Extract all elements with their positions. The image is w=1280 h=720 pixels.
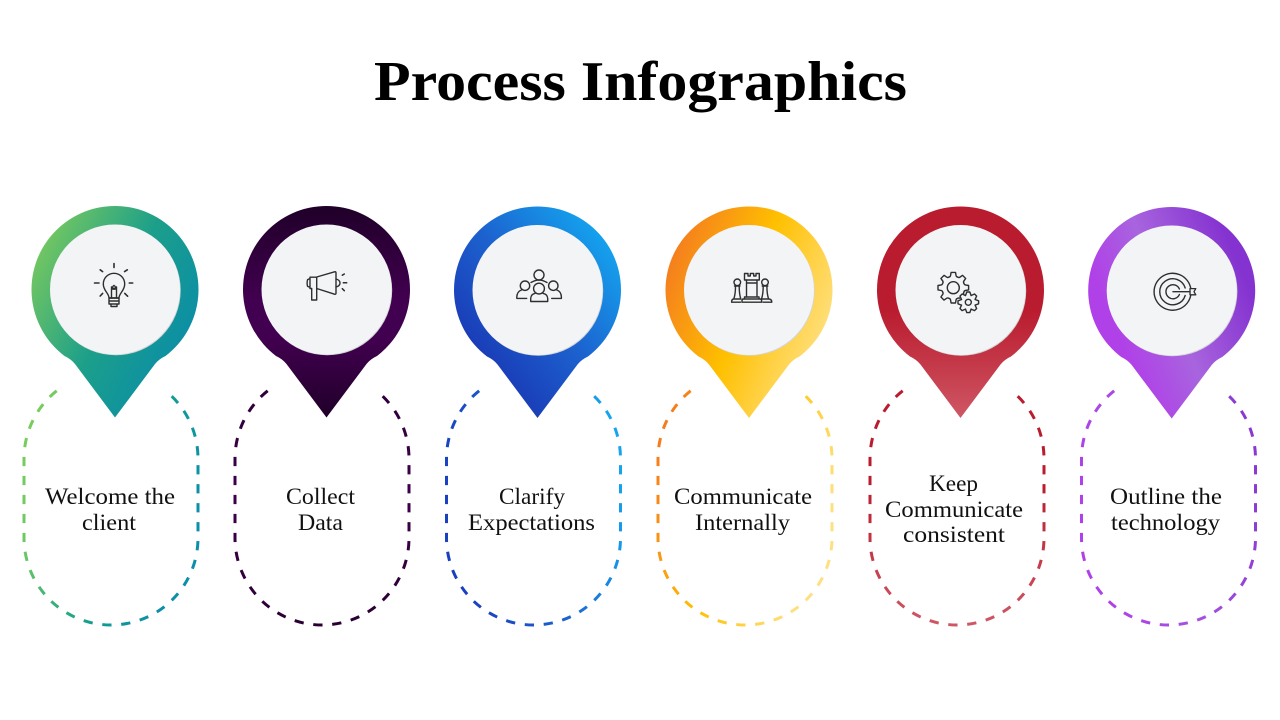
dashed outline 1: [24, 390, 198, 625]
icon: target with arrow: [1154, 273, 1196, 310]
location pin 4: [666, 207, 832, 418]
label 3: Expectations: [468, 510, 595, 535]
label 2: [286, 484, 356, 535]
label 5: Communicate: [885, 497, 1023, 522]
label 6: technology: [1111, 510, 1221, 535]
icon: gears: [938, 272, 979, 313]
step 1: welcome the client: [24, 206, 199, 625]
dashed outline 3: [446, 390, 620, 625]
icon: chess pieces: [732, 274, 772, 302]
location pin 1: [32, 206, 199, 418]
icon: light bulb: [94, 264, 133, 306]
label 1: [45, 484, 175, 535]
label 1: Welcome the: [45, 484, 175, 509]
dashed outline 5: [870, 390, 1044, 625]
location pin 5: [877, 207, 1044, 418]
label 1: client: [82, 510, 137, 535]
label 4: [674, 484, 812, 535]
label 4: Communicate: [674, 484, 812, 509]
step 3: clarify expectations: [446, 207, 621, 625]
label 5: consistent: [903, 522, 1006, 547]
dashed outline 2: [235, 390, 409, 625]
icon: group of people: [517, 270, 561, 302]
step 5: keep communicate consistent: [870, 207, 1044, 625]
step 6: outline the technology: [1082, 207, 1256, 625]
label 3: Clarify: [499, 484, 565, 509]
label 6: [1110, 484, 1222, 535]
label 4: Internally: [695, 510, 791, 535]
location pin 2: [243, 206, 410, 418]
step 2: collect data: [235, 206, 410, 625]
label 5: Keep: [929, 471, 978, 496]
label 5: [885, 471, 1023, 547]
label 6: Outline the: [1110, 484, 1222, 509]
title: Process Infographics: [374, 51, 907, 113]
label 2: Data: [298, 510, 343, 535]
location pin 6: [1088, 207, 1255, 418]
label 2: Collect: [286, 484, 356, 509]
dashed outline 4: [658, 390, 832, 625]
dashed outline 6: [1082, 390, 1256, 625]
step 4: communicate internally: [658, 207, 832, 625]
icon: megaphone: [307, 272, 347, 300]
location pin 3: [454, 207, 621, 418]
label 3: [468, 484, 595, 535]
